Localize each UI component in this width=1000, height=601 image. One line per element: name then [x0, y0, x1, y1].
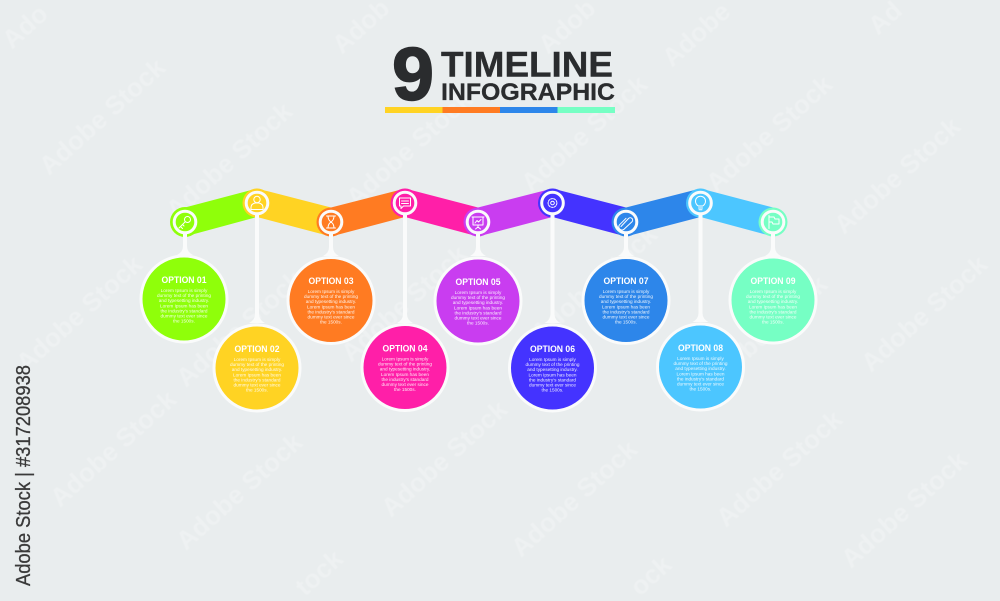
text: Adobe Stock	[835, 445, 973, 574]
panel: option 01: the industry's standard	[160, 308, 208, 313]
panel: option 09: dummy text of the printing	[746, 294, 800, 299]
title colour bar	[385, 107, 615, 113]
text: Adobe Stock	[44, 384, 182, 513]
panel: option 01: Lorem Ipsum is simply	[161, 288, 208, 293]
panel: option 02: dummy text ever since	[234, 382, 281, 388]
text: tock	[289, 543, 349, 601]
panel: option 05: Lorem Ipsum is simply	[455, 290, 502, 295]
panel: option 07	[583, 258, 669, 344]
icon: person	[246, 192, 268, 214]
panel: option 06: the industry's standard	[529, 377, 576, 382]
panel: option 04	[362, 324, 448, 410]
panel: option 08: the industry's standard	[677, 376, 724, 381]
panel: option 02: OPTION 02	[234, 344, 280, 354]
panel: option 04: dummy text of the printing	[378, 362, 432, 367]
panel: option 02: Lorem Ipsum has been	[233, 372, 281, 377]
text: Adobe Stock	[340, 84, 478, 213]
panel: option 04: Lorem Ipsum is simply	[382, 356, 429, 362]
text: Adobe Stock	[695, 269, 833, 398]
panel: option 09: the industry's standard	[749, 309, 797, 314]
panel: option 01: dummy text of the printing	[157, 293, 211, 298]
panel: option 09: the 1500s.	[762, 320, 784, 325]
icon: light bulb	[690, 192, 711, 214]
panel: option 01	[141, 256, 227, 342]
icon: hourglass	[320, 211, 342, 233]
panel: option 04: dummy text ever since	[382, 382, 429, 387]
panel: option 02: Lorem Ipsum is simply	[234, 357, 281, 362]
panel: option 03: Lorem Ipsum is simply	[308, 289, 355, 294]
panel: option 09: Lorem Ipsum is simply	[750, 289, 797, 294]
panel: option 01: the 1500s.	[173, 319, 195, 324]
text: ock	[624, 549, 678, 601]
panel: option 07: and typesetting industry.	[601, 299, 651, 304]
text: Adobe Stock	[515, 69, 653, 198]
text: Adobe Stock	[33, 52, 171, 181]
panel: option 04: Lorem Ipsum has been	[381, 372, 429, 377]
panel: option 01: Lorem Ipsum has been	[160, 303, 208, 308]
panel: option 03: Lorem Ipsum has been	[307, 304, 355, 309]
panel: option 01: dummy text ever since	[161, 314, 208, 318]
text: Adobe Stock	[170, 427, 308, 556]
panel: option 06: Lorem Ipsum has been	[529, 372, 577, 377]
panel: option 05: the industry's standard	[454, 310, 502, 315]
panel: option 09: Lorem Ipsum has been	[749, 304, 797, 309]
text: Adobe Stock	[170, 264, 308, 393]
icon: presentation board	[467, 211, 489, 233]
panel: option 09: and typesetting industry.	[748, 299, 798, 304]
text: Adobe Stock	[855, 249, 993, 378]
panel: option 09	[730, 257, 816, 343]
stock id caption: Adobe Stock | #317208938	[13, 365, 35, 586]
icon: paper clip	[615, 211, 637, 233]
panel: option 06: dummy text of the printing	[526, 362, 580, 367]
text: Adobe Stock	[375, 394, 513, 523]
panel: option 08: Lorem Ipsum is simply	[677, 356, 724, 361]
icon: key	[174, 211, 196, 233]
panel: option 06: dummy text ever since	[529, 382, 576, 388]
panel: option 08: dummy text of the printing	[674, 361, 728, 366]
panel: option 03: OPTION 03	[308, 276, 354, 286]
text: Adobe Stock	[160, 96, 298, 225]
panel: option 07: dummy text of the printing	[599, 294, 653, 299]
panel: option 08: the 1500s.	[690, 387, 711, 392]
panel: option 04: the industry's standard	[381, 377, 429, 382]
text: Adobe Stock	[505, 434, 643, 563]
panel: option 01: and typesetting industry.	[159, 298, 209, 303]
zigzag timeline band	[170, 188, 788, 237]
panel: option 08: dummy text ever since	[677, 382, 724, 386]
panel: option 07: OPTION 07	[604, 276, 648, 286]
text: Adobe Stock	[710, 404, 848, 533]
panel: option 06: and typesetting industry.	[527, 367, 578, 372]
title	[392, 32, 615, 116]
panel: option 07: the industry's standard	[602, 309, 650, 314]
icon: flag	[762, 211, 784, 233]
panel: option 08	[658, 324, 744, 410]
panel: option 05: the 1500s.	[467, 321, 489, 326]
panel: option 02: and typesetting industry.	[232, 367, 282, 372]
text: Adobe Stock	[828, 111, 966, 240]
panel: option 03	[288, 258, 374, 344]
panel: option 05: OPTION 05	[456, 277, 500, 287]
panel: option 02: the 1500s.	[246, 388, 268, 393]
panel: option 07: dummy text ever since	[603, 314, 650, 320]
panel: option 07: the 1500s.	[615, 320, 637, 325]
panel: option 08: Lorem Ipsum has been	[677, 371, 725, 376]
panel: option 04: the 1500s.	[394, 387, 416, 392]
title line 2: INFOGRAPHIC	[441, 79, 615, 106]
panel: option 06	[510, 325, 596, 411]
panel: option 03: the 1500s.	[320, 320, 342, 325]
panel: option 04: OPTION 04	[382, 344, 428, 354]
panel: option 07: Lorem Ipsum has been	[602, 304, 650, 309]
panel: option 08: OPTION 08	[678, 343, 723, 353]
connector stems	[177, 213, 781, 323]
title numeral: 9	[392, 32, 434, 116]
panel: option 05: dummy text of the printing	[451, 295, 505, 300]
panel: option 08: and typesetting industry.	[675, 366, 726, 371]
panel: option 02: the industry's standard	[233, 377, 281, 382]
panel: option 09: OPTION 09	[750, 276, 796, 286]
panel: option 02	[214, 325, 300, 411]
text: Adobe Stock	[525, 219, 663, 348]
panel: option 06: OPTION 06	[530, 344, 575, 354]
icon: chat bubble	[394, 192, 416, 214]
panel: option 03: and typesetting industry.	[306, 299, 356, 304]
panel: option 07: Lorem Ipsum is simply	[603, 289, 650, 294]
panel: option 06: Lorem Ipsum is simply	[529, 357, 576, 362]
panel: option 05: dummy text ever since	[455, 316, 502, 320]
panel: option 05: and typesetting industry.	[453, 300, 503, 305]
panel: option 03: dummy text ever since	[308, 314, 355, 320]
panel: option 09: dummy text ever since	[750, 314, 797, 320]
text: Adobe Stock	[700, 69, 838, 198]
panel: option 05	[435, 258, 521, 344]
panel: option 05: Lorem Ipsum has been	[454, 305, 502, 310]
panel: option 02: dummy text of the printing	[230, 362, 284, 367]
panel: option 03: the industry's standard	[307, 309, 355, 314]
panel: option 06: the 1500s.	[542, 388, 563, 393]
panel: option 04: and typesetting industry.	[380, 367, 430, 372]
text: Adobe Stock	[335, 239, 473, 368]
title line 1: TIMELINE	[441, 44, 613, 84]
panel: option 01: OPTION 01	[162, 275, 206, 285]
panel: option 03: dummy text of the printing	[304, 294, 358, 299]
icon: gear	[542, 192, 563, 214]
text: Adobe Stock	[10, 249, 148, 378]
